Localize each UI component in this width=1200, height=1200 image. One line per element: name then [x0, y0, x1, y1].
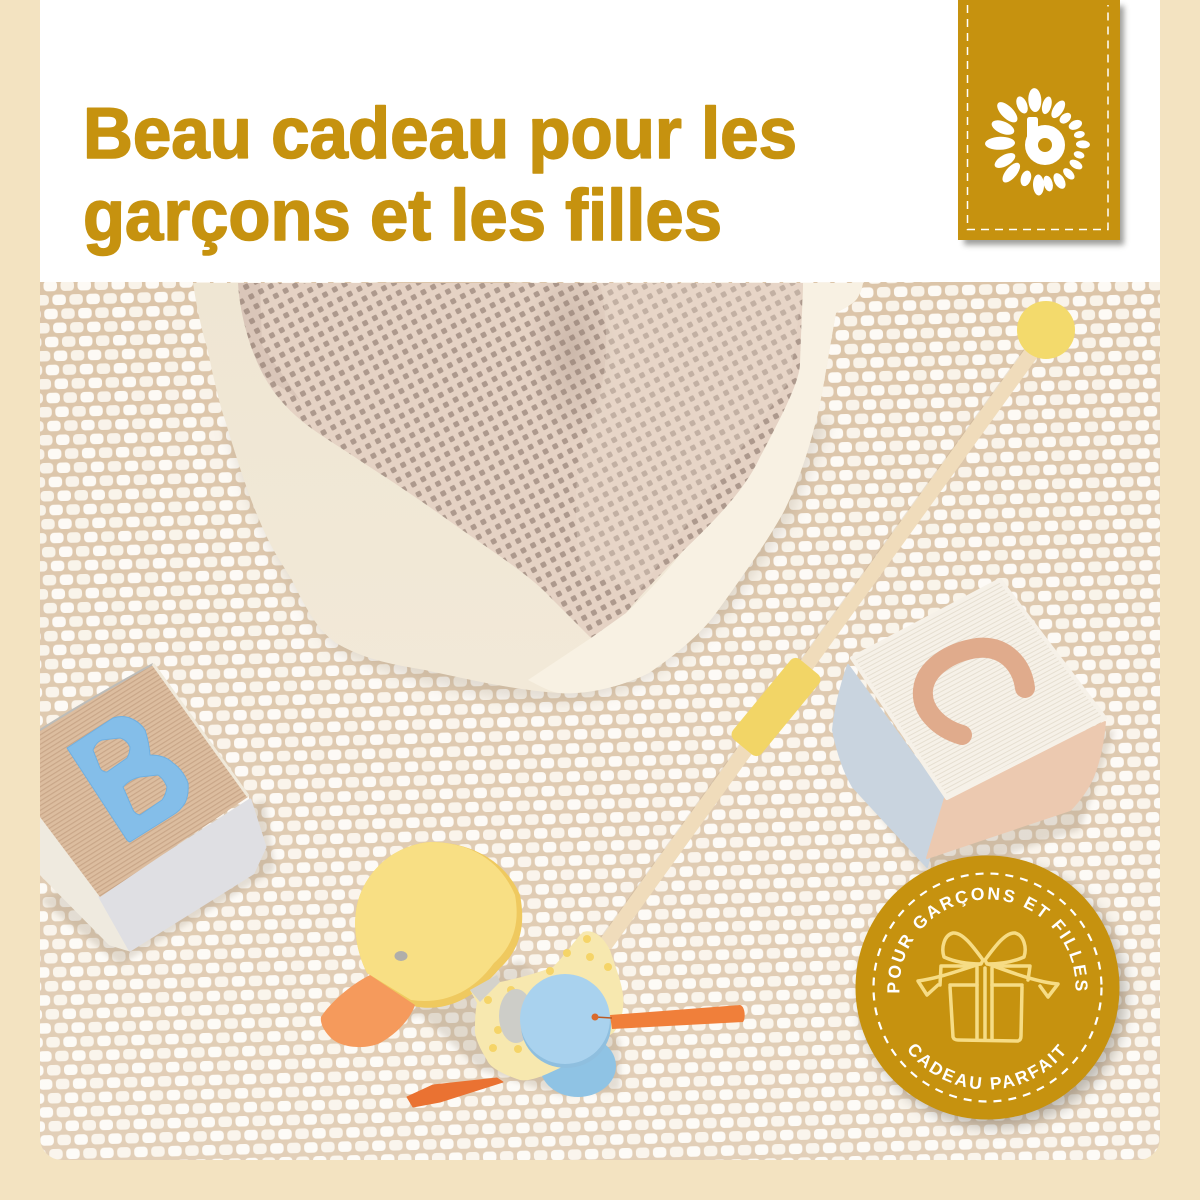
rug [40, 282, 1160, 1160]
title: garçons et les filles [83, 176, 722, 256]
leg rear [407, 1078, 503, 1107]
letter block C [833, 580, 1115, 880]
duck toy [321, 842, 745, 1107]
brand tag [958, 0, 1124, 245]
title: Beau cadeau pour les [83, 94, 797, 174]
beak [321, 975, 415, 1047]
letter C [923, 648, 1025, 735]
round badge [854, 856, 1134, 1135]
front wheel [521, 1014, 611, 1068]
letter B [67, 716, 188, 842]
badge text bottom: CADEAU PARFAIT [908, 1044, 1064, 1090]
icon: gift [918, 933, 1058, 1041]
badge text top: POUR GARÇONS ET FILLES [887, 887, 1088, 992]
product photo [40, 255, 1160, 1160]
header panel [40, 0, 1160, 282]
waffle blanket [238, 255, 803, 638]
ball [1017, 301, 1075, 359]
title [83, 94, 797, 256]
rear wheel [542, 1045, 616, 1097]
icon: sunflower logo [985, 88, 1090, 196]
leg front [610, 1005, 745, 1029]
letter block B [40, 664, 275, 965]
duck head [355, 842, 522, 1008]
pull stick [601, 301, 1075, 949]
sleeve [732, 658, 820, 756]
bean bag [193, 283, 863, 702]
duck body [470, 931, 623, 1080]
